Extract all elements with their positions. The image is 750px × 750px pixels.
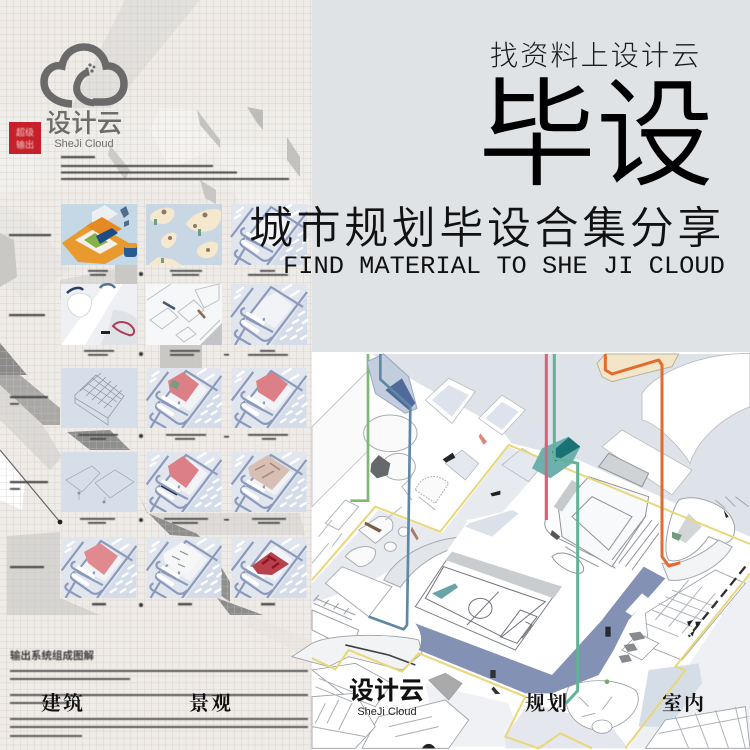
logo: cloud — [44, 47, 124, 104]
label: architecture: 建筑 — [41, 692, 85, 715]
body text lines — [10, 670, 308, 737]
label: landscape: 景观 — [189, 692, 233, 715]
tile: street white block — [147, 538, 221, 598]
subtitle: 城市规划毕设合集分享 — [249, 192, 725, 256]
dark hex pavilion — [370, 455, 390, 478]
intro text lines — [61, 156, 289, 180]
tile: wireframe — [61, 452, 137, 512]
orange line — [605, 354, 680, 566]
tile: street red block — [147, 368, 221, 428]
right buildings — [622, 570, 750, 748]
tile: isometric building — [61, 204, 137, 265]
logo subtitle: SheJi Cloud — [54, 138, 114, 150]
label: interior: 室内 — [662, 691, 706, 715]
right side grandstand — [545, 453, 659, 573]
teal line — [554, 354, 578, 703]
panel: poster background — [0, 0, 312, 750]
left plaza details — [345, 415, 449, 567]
red line over pavilion — [542, 443, 551, 520]
panel: isometric masterplan — [292, 353, 750, 750]
tile: white line plan — [146, 284, 222, 345]
label: planning: 规划 — [525, 692, 569, 715]
curved bridge — [384, 537, 525, 587]
tile: street map — [231, 204, 307, 265]
title huge: 毕设 — [478, 39, 714, 210]
main white building — [415, 508, 645, 675]
green line — [350, 354, 368, 501]
heading: output system: 输出系统组成图解 — [10, 648, 94, 663]
tile: wireframe — [61, 368, 137, 428]
sports field — [415, 552, 562, 650]
tile: street red block — [232, 368, 306, 428]
title small: 找资料上设计云 — [490, 34, 701, 74]
caption markers — [139, 272, 229, 607]
panel: top right grey title area — [312, 0, 750, 352]
panel: red badge — [9, 122, 41, 154]
logo wordmark: 设计云 — [46, 103, 122, 140]
blue plaza — [415, 567, 665, 693]
panel: red badge: 输出 — [16, 138, 34, 151]
subtitle english: FIND MATERIAL TO SHE JI CLOUD — [283, 252, 725, 281]
tile: street map — [231, 284, 307, 345]
yellow paths — [312, 445, 750, 748]
bottom buildings — [292, 635, 638, 748]
tile captions — [78, 270, 288, 605]
panel: red badge: 超级 — [16, 126, 34, 138]
orange pavilion — [597, 354, 679, 382]
tile: street textured block — [232, 452, 306, 512]
centre subtitle: SheJi Cloud — [357, 706, 417, 718]
surrounding buildings — [312, 353, 750, 507]
teal pavilion — [532, 437, 580, 478]
tile: street dark red block — [232, 538, 306, 598]
tile: street red block — [62, 538, 136, 598]
row labels — [9, 234, 51, 568]
glass pavilion blue — [367, 354, 417, 413]
steel blue line — [369, 354, 410, 629]
tile: white site plan — [61, 284, 137, 345]
image grid — [61, 204, 307, 598]
people — [364, 433, 729, 748]
centre wordmark: 设计云 — [349, 671, 424, 707]
red line — [542, 354, 551, 520]
tile: street red block — [147, 452, 221, 512]
diagonal guide line — [0, 450, 62, 524]
pale blue ground — [372, 354, 750, 537]
tile: blob plan — [146, 204, 222, 265]
